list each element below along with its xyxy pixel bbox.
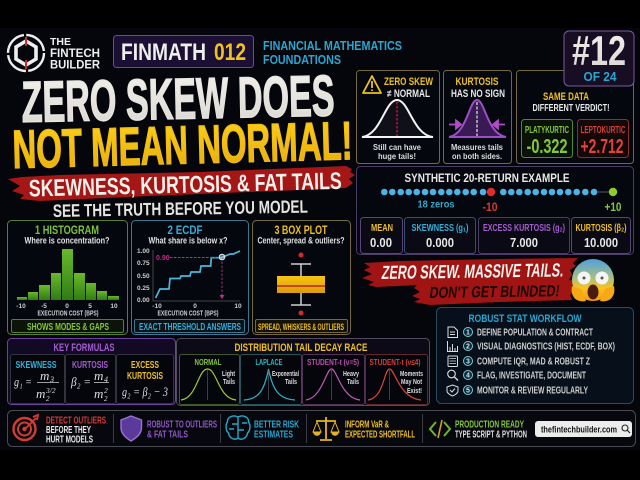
dot plot of returns: +10 <box>604 200 622 214</box>
stat: mean: MEAN <box>371 222 393 234</box>
panel: histogram: Where is concentration? <box>24 236 110 246</box>
formula: skewness: m <box>40 368 49 383</box>
stat: excess kurtosis: EXCESS KURTOSIS (g₂) <box>483 222 565 234</box>
callout: zero skew massive tails <box>362 258 578 305</box>
ECDF chart: 0.50 <box>137 273 150 280</box>
logo: The Fintech Builder <box>8 35 100 72</box>
cell: student-t v≤4: Moments <box>400 369 423 378</box>
formula: skewness: 3 <box>49 375 54 384</box>
panel: kurtosis has no sign <box>444 70 512 164</box>
panel: same data different verdict: SAME DATA <box>543 91 589 103</box>
dot plot of returns <box>381 188 622 214</box>
benefit: inform VaR: EXPECTED SHORTFALL <box>345 430 415 440</box>
platykurtic value <box>522 120 572 158</box>
formula: kurtosis: 2 <box>104 395 108 403</box>
ECDF chart: 0.75 <box>137 260 150 267</box>
benefit: robust to outliers <box>121 416 217 441</box>
step 5: monitor and review: MONITOR & REVIEW REGULARLY <box>477 386 588 396</box>
step 4: flag and investigate: 4 <box>466 372 470 380</box>
dot plot of returns: 18 zeros <box>418 200 455 210</box>
stat: kurtosis <box>572 218 630 254</box>
stat: skewness: SKEWNESS (g₁) <box>412 222 468 234</box>
panel: kurtosis has no sign: on both sides. <box>452 151 502 161</box>
panel: box plot: Center, spread & outliers? <box>258 236 344 246</box>
step 1: define population <box>448 327 593 338</box>
benefit: detect outliers: HURT MODELS <box>46 434 93 446</box>
callout: zero skew massive tails: DON'T GET BLINDED! <box>428 282 561 302</box>
benefit: inform VaR <box>313 417 415 440</box>
stat: excess kurtosis: 7.000 <box>510 235 538 250</box>
main title: ZERO SKEW DOES <box>21 63 335 135</box>
axis labels: -10 <box>16 303 26 310</box>
ECDF chart: 1.00 <box>137 248 150 255</box>
banner: skewness, kurtosis and fat tails: SKEWNESS, KURTOSIS & FAT TAILS <box>28 168 342 202</box>
panel: box plot <box>252 220 350 334</box>
arrows: squeeze <box>449 120 505 128</box>
stat: skewness: 0.000 <box>426 235 454 250</box>
website pill <box>535 421 632 437</box>
axis labels: 0 <box>65 303 69 310</box>
formula: skewness: 3/2 <box>45 386 56 395</box>
cell: student-t v=5: Tails <box>347 377 359 386</box>
panel: same data different verdict <box>516 70 634 164</box>
panel: distribution tail decay race <box>176 338 430 406</box>
panel: zero skew: Still can have <box>373 142 421 152</box>
axis labels: 5 <box>88 303 92 310</box>
formula: skewness: SKEWNESS <box>16 360 57 371</box>
panel: key formulas: KEY FORMULAS <box>54 342 114 354</box>
cell: student-t v=5: Heavy <box>343 369 360 378</box>
panel: histogram: 1 HISTOGRAM <box>35 225 99 237</box>
cell: student-t v≤4: Exist! <box>407 386 422 395</box>
box plot chart <box>277 252 325 316</box>
series badge: FINMATH 012 <box>114 36 254 68</box>
panel: synthetic 20-return example <box>356 166 634 254</box>
benefit: production ready: PRODUCTION READY <box>455 420 524 430</box>
benefit: inform VaR: INFORM VaR & <box>345 420 389 430</box>
formula: skewness <box>10 354 64 404</box>
benefit: better risk estimates: ESTIMATES <box>254 430 293 440</box>
cell: normal: NORMAL <box>194 357 222 367</box>
benefits strip <box>8 410 636 446</box>
footer: exact threshold answers: EXACT THRESHOLD ANSWERS <box>139 322 241 333</box>
formula: skewness: m <box>36 386 45 401</box>
stat: mean <box>360 218 402 254</box>
website pill: thefintechbuilder.com <box>541 424 617 434</box>
ECDF chart: 0.25 <box>137 285 150 292</box>
bar chart <box>17 249 119 300</box>
dot plot of returns: -10 <box>482 200 498 214</box>
step 2: visual diagnostics <box>448 341 615 352</box>
axis labels <box>16 303 118 318</box>
cell: laplace: Exponential <box>272 369 299 378</box>
cell: laplace: Tails <box>285 377 297 386</box>
panel: zero skew: ZERO SKEW <box>384 76 433 88</box>
step 3: compute IQR <box>448 356 590 368</box>
axis labels: -5 <box>41 303 47 310</box>
logo: The Fintech Builder: FINTECH <box>50 46 100 60</box>
panel: kurtosis has no sign: Measures tails <box>451 142 503 152</box>
formula: kurtosis: KURTOSIS <box>72 360 108 371</box>
badge: number 12 of 24: #12 <box>572 27 626 74</box>
panel: histogram <box>8 220 128 334</box>
step 5: monitor and review: 5 <box>466 388 470 394</box>
formula: kurtosis: m <box>94 386 103 401</box>
panel: ECDF <box>132 220 248 334</box>
formula: kurtosis: m <box>94 368 103 383</box>
icon: warning triangle <box>363 76 381 93</box>
ECDF chart: 0 <box>193 303 197 310</box>
benefit: production ready <box>430 420 527 440</box>
platykurtic value: PLATYKURTIC <box>525 124 569 136</box>
axis labels: EXECUTION COST (BPS) <box>38 310 98 318</box>
logo: The Fintech Builder: THE <box>50 36 71 48</box>
panel: kurtosis has no sign: HAS NO SIGN <box>451 88 505 100</box>
step 3: compute IQR: COMPUTE IQR, MAD & ROBUST Z <box>477 356 590 368</box>
main title <box>12 63 353 180</box>
ECDF chart: 10 <box>234 303 242 310</box>
tagline: SEE THE TRUTH BEFORE YOU MODEL <box>53 197 308 221</box>
subtitle: Financial Mathematics Foundations: FINANCIAL MATHEMATICS <box>263 38 402 53</box>
cell: normal <box>180 354 240 404</box>
peaked curve <box>449 100 506 137</box>
stat: mean: 0.00 <box>370 235 392 250</box>
subtitle: Financial Mathematics Foundations: FOUNDATIONS <box>263 52 341 67</box>
formula: kurtosis: β₂ = <box>70 374 91 389</box>
footer: shows modes and gaps: SHOWS MODES & GAPS <box>27 322 109 333</box>
step 2: visual diagnostics: 2 <box>466 344 470 350</box>
panel: box plot: 3 BOX PLOT <box>274 225 328 237</box>
axis labels: 10 <box>110 303 118 310</box>
formula: excess kurtosis: g₂ = β₂ − 3 <box>122 384 168 399</box>
stat: excess kurtosis <box>478 218 570 254</box>
step 4: flag and investigate <box>448 370 586 382</box>
panel: zero skew: ≠ NORMAL <box>387 88 430 100</box>
cell: laplace: LAPLACE <box>256 357 283 367</box>
stat: skewness <box>404 218 476 254</box>
benefit: better risk estimates: BETTER RISK <box>254 420 299 430</box>
cell: normal: Tails <box>223 377 235 386</box>
panel: distribution tail decay race: DISTRIBUTION TAIL DECAY RACE <box>234 342 368 354</box>
normal curve <box>362 100 433 137</box>
panel: kurtosis has no sign: KURTOSIS <box>456 76 498 88</box>
cell: laplace <box>240 354 302 404</box>
platykurtic value: -0.322 <box>526 136 568 158</box>
ECDF chart: EXECUTION COST (BPS) <box>158 310 218 318</box>
panel: synthetic 20-return example: SYNTHETIC 20-RETURN EXAMPLE <box>404 173 570 185</box>
ECDF chart: 0.00 <box>137 297 150 304</box>
ECDF chart: -10 <box>152 303 162 310</box>
benefit: better risk estimates <box>226 416 299 440</box>
step 3: compute IQR: 3 <box>466 358 470 366</box>
benefit: production ready: TYPE SCRIPT & PYTHON <box>455 430 527 440</box>
benefit: robust to outliers: & FAT TAILS <box>147 430 188 440</box>
formula: excess kurtosis: EXCESS <box>131 360 159 371</box>
panel: ECDF: 2 ECDF <box>168 225 202 237</box>
benefit: detect outliers <box>14 415 106 446</box>
formula: excess kurtosis: KURTOSIS <box>127 371 163 382</box>
ECDF chart: 0.90 <box>156 255 170 262</box>
cell: normal: Light <box>222 369 235 378</box>
step 1: define population: 1 <box>466 330 470 336</box>
formula: kurtosis <box>66 354 116 404</box>
main title: NOT MEAN NORMAL! <box>12 111 353 180</box>
benefit: robust to outliers: ROBUST TO OUTLIERS <box>147 420 217 430</box>
formula: kurtosis: 4 <box>104 375 108 384</box>
cell: student-t v≤4: STUDENT-t (ν≤4) <box>370 357 421 367</box>
benefit: detect outliers: DETECT OUTLIERS <box>46 416 106 426</box>
leptokurtic value <box>578 120 628 158</box>
panel: robust stat workflow <box>436 308 634 404</box>
subtitle: Financial Mathematics Foundations <box>263 38 402 67</box>
formula: skewness: g₁ = <box>14 374 32 389</box>
ECDF chart <box>137 248 242 318</box>
panel: robust stat workflow: ROBUST STAT WORKFLOW <box>468 313 582 325</box>
step 5: monitor and review <box>447 385 588 396</box>
stat: kurtosis: 10.000 <box>584 235 618 250</box>
cell: student-t v≤4 <box>366 354 428 404</box>
logo: The Fintech Builder: BUILDER <box>50 58 100 72</box>
panel: same data different verdict: DIFFERENT VERDICT! <box>532 103 610 114</box>
benefit: detect outliers: BEFORE THEY <box>46 425 91 436</box>
formula: kurtosis: 2 <box>104 386 108 395</box>
icon: screaming face emoji <box>572 259 614 301</box>
cell: student-t v=5: STUDENT-t (ν=5) <box>307 357 359 367</box>
panel: zero skew <box>356 70 440 164</box>
badge: number 12 of 24 <box>564 27 634 86</box>
panel: zero skew: huge tails! <box>378 151 416 161</box>
series badge: FINMATH 012: 012 <box>214 39 246 66</box>
cell: student-t v≤4: May Not <box>401 377 422 386</box>
step 4: flag and investigate: FLAG, INVESTIGATE, DOCUMENT <box>477 370 586 382</box>
formula: excess kurtosis <box>116 354 174 404</box>
panel: key formulas <box>8 338 176 404</box>
series badge: FINMATH 012: FINMATH <box>121 39 206 66</box>
footer: spread, whiskers and outliers: SPREAD, WHISKERS & OUTLIERS <box>258 322 344 333</box>
cell: student-t v=5 <box>302 354 364 404</box>
formula: skewness: 2 <box>46 395 50 403</box>
panel: ECDF: What share is below x? <box>148 236 228 246</box>
badge: number 12 of 24: OF 24 <box>584 69 617 84</box>
